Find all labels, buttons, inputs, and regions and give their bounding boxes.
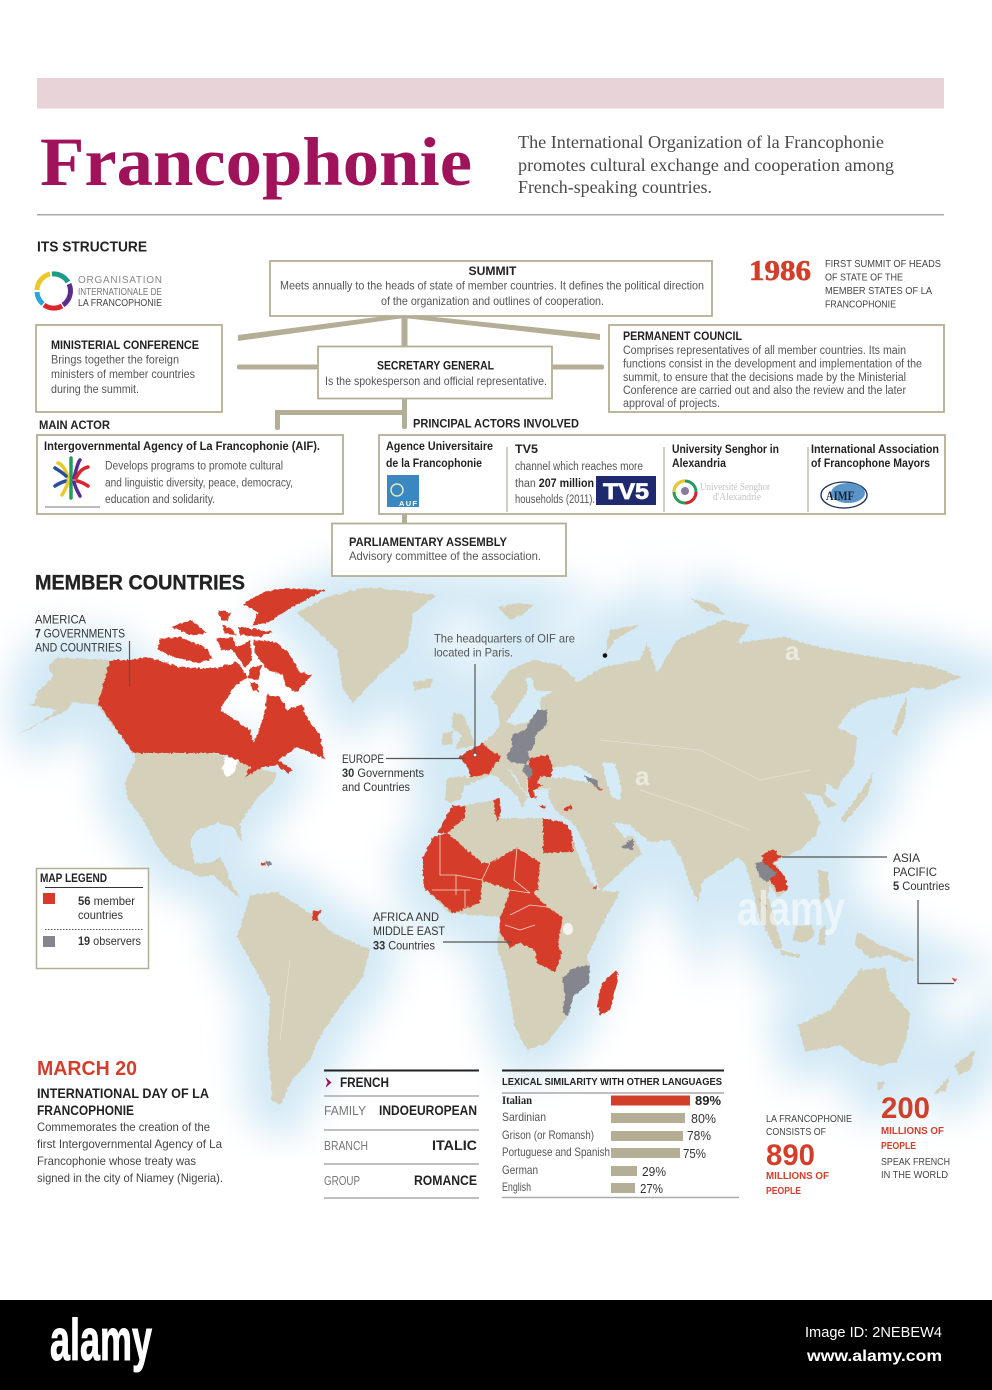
- box: principal actors: [379, 435, 945, 514]
- table: French classification: FAMILY: [324, 1104, 367, 1118]
- box: summit: of the organization and outlines of cooperation.: [381, 294, 604, 308]
- watermark: a: [635, 761, 650, 791]
- stat: 890 millions: 890: [766, 1139, 815, 1172]
- Mayors: of Francophone Mayors: [811, 458, 930, 470]
- fact: 1986: OF STATE OF THE: [825, 272, 903, 284]
- box: permanent council: Comprises representatives of all member countries. Its main: [623, 345, 906, 357]
- bar chart: lexical similarity: LEXICAL SIMILARITY WITH OTHER LANGUAGES: [502, 1077, 722, 1088]
- legend: members: [43, 893, 135, 922]
- table: French classification: ROMANCE: [414, 1173, 477, 1188]
- bars: [611, 1096, 690, 1193]
- fact: 1986: [749, 256, 941, 310]
- land masses: [15, 587, 975, 1105]
- intro text: promotes cultural exchange and cooperation among: [518, 155, 894, 175]
- box: permanent council: summit, to ensure that the decisions made by the Ministerial: [623, 372, 906, 384]
- member countries: Africa: [423, 798, 618, 1015]
- row labels: Grison (or Romansh): [502, 1128, 594, 1142]
- connectors: [237, 316, 604, 523]
- ocean glow: [15, 587, 975, 1105]
- box: permanent council: approval of projects.: [623, 398, 720, 410]
- fact: 1986: FIRST SUMMIT OF HEADS: [825, 258, 941, 270]
- callout: Europe: 30 Governments: [342, 766, 424, 780]
- box: permanent council: PERMANENT COUNCIL: [623, 329, 742, 343]
- box: summit: SUMMIT: [468, 266, 516, 278]
- AUF: de la Francophonie: [386, 458, 482, 470]
- percent values: 75%: [683, 1146, 706, 1161]
- row labels: Portuguese and Spanish: [502, 1145, 610, 1159]
- row labels: Italian: [502, 1093, 532, 1107]
- header band: [37, 78, 944, 108]
- TV5: TV5: [515, 444, 539, 456]
- note: March 20: INTERNATIONAL DAY OF LA: [37, 1086, 209, 1101]
- callout: America: [35, 612, 130, 686]
- callout: headquarters: The headquarters of OIF are: [434, 632, 575, 646]
- stat: 200 millions: PEOPLE: [881, 1140, 916, 1152]
- callout: America: 7 GOVERNMENTS: [35, 626, 125, 640]
- box: main actor AIF: and linguistic diversity, peace, democracy,: [105, 478, 293, 490]
- stat: 890 millions: CONSISTS OF: [766, 1126, 826, 1138]
- AUF: [386, 441, 493, 508]
- University Senghor: Alexandria: [672, 458, 727, 470]
- intro text: French-speaking countries.: [518, 177, 712, 197]
- logo: Senghor: d'Alexandrie: [713, 492, 762, 503]
- box: summit: Meets annually to the heads of state of member countries. It defines the political direction: [280, 278, 704, 292]
- note: March 20: Francophonie whose treaty was: [37, 1154, 196, 1168]
- footer bar: alamy: [50, 1308, 152, 1373]
- member countries: Asia Pacific: [261, 849, 957, 983]
- logo: AUF: AUF: [399, 499, 417, 508]
- box: main actor AIF: Intergovernmental Agency of La Francophonie (AIF).: [44, 439, 320, 453]
- world map: [15, 587, 975, 1105]
- stat: 890 millions: LA FRANCOPHONIE: [766, 1113, 852, 1125]
- callout: Asia Pacific: [782, 851, 954, 984]
- callout: Africa: MIDDLE EAST: [373, 924, 446, 938]
- table: French classification: ITALIC: [432, 1138, 477, 1153]
- percent values: 78%: [687, 1128, 711, 1143]
- watermark: alamy: [737, 883, 845, 936]
- Mayors: International Association: [811, 444, 939, 456]
- table: French classification: GROUP: [324, 1174, 360, 1188]
- callout: America: AND COUNTRIES: [35, 640, 122, 654]
- stat: 200 millions: 200: [881, 1092, 930, 1125]
- member countries: Canada: [98, 588, 325, 777]
- footer bar: Image ID: 2NEBEW4: [805, 1325, 942, 1341]
- box: ministerial conference: Brings together the foreign: [51, 352, 179, 366]
- legend: observers: 19 observers: [78, 934, 141, 948]
- inland seas: [222, 678, 622, 800]
- stat: 890 millions: MILLIONS OF: [766, 1170, 830, 1182]
- footer bar: www.alamy.com: [806, 1348, 942, 1365]
- note: March 20: first Intergovernmental Agency of La: [37, 1137, 222, 1151]
- percent values: 27%: [640, 1181, 663, 1196]
- map legend: MAP LEGEND: [40, 871, 107, 885]
- watermark: a: [785, 636, 800, 666]
- logo: OIF: INTERNATIONALE DE: [78, 287, 162, 298]
- logo: AIMF: AIMF: [826, 488, 854, 503]
- member countries: Europe: [458, 743, 603, 811]
- intro text: [518, 132, 894, 197]
- stat: 200 millions: MILLIONS OF: [881, 1125, 945, 1137]
- fact: 1986: MEMBER STATES OF LA: [825, 285, 932, 297]
- fact: 1986: FRANCOPHONIE: [825, 298, 896, 310]
- stat: 200 millions: SPEAK FRENCH: [881, 1156, 950, 1168]
- callout: Europe: EUROPE: [342, 752, 384, 766]
- stat: 200 millions: [881, 1092, 950, 1181]
- note: March 20: signed in the city of Niamey (Nigeria).: [37, 1171, 223, 1185]
- row labels: German: [502, 1163, 538, 1177]
- callout: Asia Pacific: PACIFIC: [893, 865, 937, 879]
- box: ministerial conference: MINISTERIAL CONFERENCE: [51, 338, 199, 352]
- box: ministerial conference: during the summit.: [51, 382, 139, 396]
- TV5: households (2011).: [515, 494, 595, 506]
- callout: Asia Pacific: ASIA: [893, 851, 920, 865]
- box: permanent council: Conference are carried out and also the review and the later: [623, 385, 906, 397]
- callout: Africa: [373, 910, 512, 952]
- row labels: Sardinian: [502, 1110, 546, 1124]
- AUF: Agence Universitaire: [386, 441, 493, 453]
- heading: member countries: MEMBER COUNTRIES: [35, 572, 245, 594]
- box: secretary general: [318, 346, 552, 398]
- legend: members: countries: [78, 908, 123, 922]
- TV5: [515, 444, 656, 506]
- box: parliamentary assembly: [332, 524, 566, 576]
- logo: OIF: [37, 274, 162, 309]
- heading: main actor: MAIN ACTOR: [39, 418, 110, 432]
- box: main actor AIF: education and solidarity.: [105, 494, 215, 506]
- stat: 890 millions: [766, 1113, 852, 1197]
- TV5: channel which reaches more: [515, 461, 643, 473]
- logo: AIF: [55, 458, 88, 498]
- box: main actor AIF: Develops programs to promote cultural: [105, 460, 283, 472]
- table: French classification: INDOEUROPEAN: [379, 1103, 477, 1118]
- callout: Africa: AFRICA AND: [373, 910, 439, 924]
- box: main actor AIF: [37, 435, 343, 514]
- dot: Russia marker: [603, 653, 607, 658]
- callout: Europe: [342, 752, 465, 794]
- logo: Senghor: [674, 481, 771, 503]
- callout: headquarters: [434, 632, 575, 757]
- box: secretary general: Is the spokesperson and official representative.: [325, 374, 547, 388]
- University Senghor: University Senghor in: [672, 444, 779, 456]
- box: permanent council: functions consist in the development and implementation of the: [623, 358, 922, 370]
- callout: Asia Pacific: 5 Countries: [893, 879, 950, 893]
- lake: [563, 923, 573, 935]
- stat: 200 millions: IN THE WORLD: [881, 1169, 948, 1181]
- chevron: [326, 1078, 331, 1087]
- box: ministerial conference: ministers of member countries: [51, 367, 195, 381]
- callout: headquarters: located in Paris.: [434, 646, 513, 660]
- callout: Europe: and Countries: [342, 780, 410, 794]
- table: French classification: [324, 1070, 479, 1198]
- box: secretary general: SECRETARY GENERAL: [377, 358, 494, 372]
- map legend: [36, 868, 148, 968]
- box: parliamentary assembly: Advisory committee of the association.: [349, 549, 541, 563]
- table: French classification: FRENCH: [340, 1075, 389, 1090]
- logo: OIF: LA FRANCOPHONIE: [78, 298, 162, 309]
- University Senghor: [672, 444, 779, 503]
- heading: principal actors: PRINCIPAL ACTORS INVOLVED: [413, 416, 579, 430]
- note: March 20: Commemorates the creation of the: [37, 1120, 210, 1134]
- logo: OIF: ORGANISATION: [78, 275, 162, 286]
- watermark: [635, 636, 845, 936]
- box: permanent council: [609, 325, 944, 412]
- table: French classification: BRANCH: [324, 1139, 368, 1153]
- TV5: than 207 million: [515, 478, 594, 490]
- note: March 20: MARCH 20: [37, 1058, 137, 1080]
- observer countries: [265, 710, 777, 1017]
- country borders: [432, 835, 547, 930]
- logo: Senghor: Université Senghor: [700, 482, 771, 493]
- bar chart: lexical similarity: [502, 1070, 739, 1198]
- box: summit: [270, 261, 712, 316]
- logo: TV5: [596, 476, 656, 505]
- footer bar: [0, 1300, 992, 1390]
- fact: 1986: 1986: [749, 256, 811, 287]
- Mayors: [811, 444, 939, 508]
- note: March 20: [37, 1058, 223, 1185]
- box: parliamentary assembly: PARLIAMENTARY ASSEMBLY: [349, 535, 507, 549]
- percent values: 89%: [695, 1093, 721, 1108]
- percent values: [640, 1093, 721, 1196]
- legend: members: 56 member: [78, 894, 135, 908]
- intro text: The International Organization of la Francophonie: [518, 132, 884, 152]
- percent values: 29%: [642, 1164, 666, 1179]
- callout: Africa: 33 Countries: [373, 938, 435, 952]
- logo: TV5: TV5: [603, 479, 649, 504]
- row labels: [502, 1093, 610, 1194]
- callout: America: AMERICA: [35, 612, 86, 626]
- row labels: English: [502, 1180, 531, 1194]
- title: Francophonie: [40, 124, 472, 200]
- section heading: its structure: ITS STRUCTURE: [37, 238, 147, 256]
- note: March 20: FRANCOPHONIE: [37, 1103, 134, 1118]
- percent values: 80%: [691, 1111, 716, 1126]
- box: ministerial conference: [36, 325, 222, 412]
- stat: 890 millions: PEOPLE: [766, 1185, 801, 1197]
